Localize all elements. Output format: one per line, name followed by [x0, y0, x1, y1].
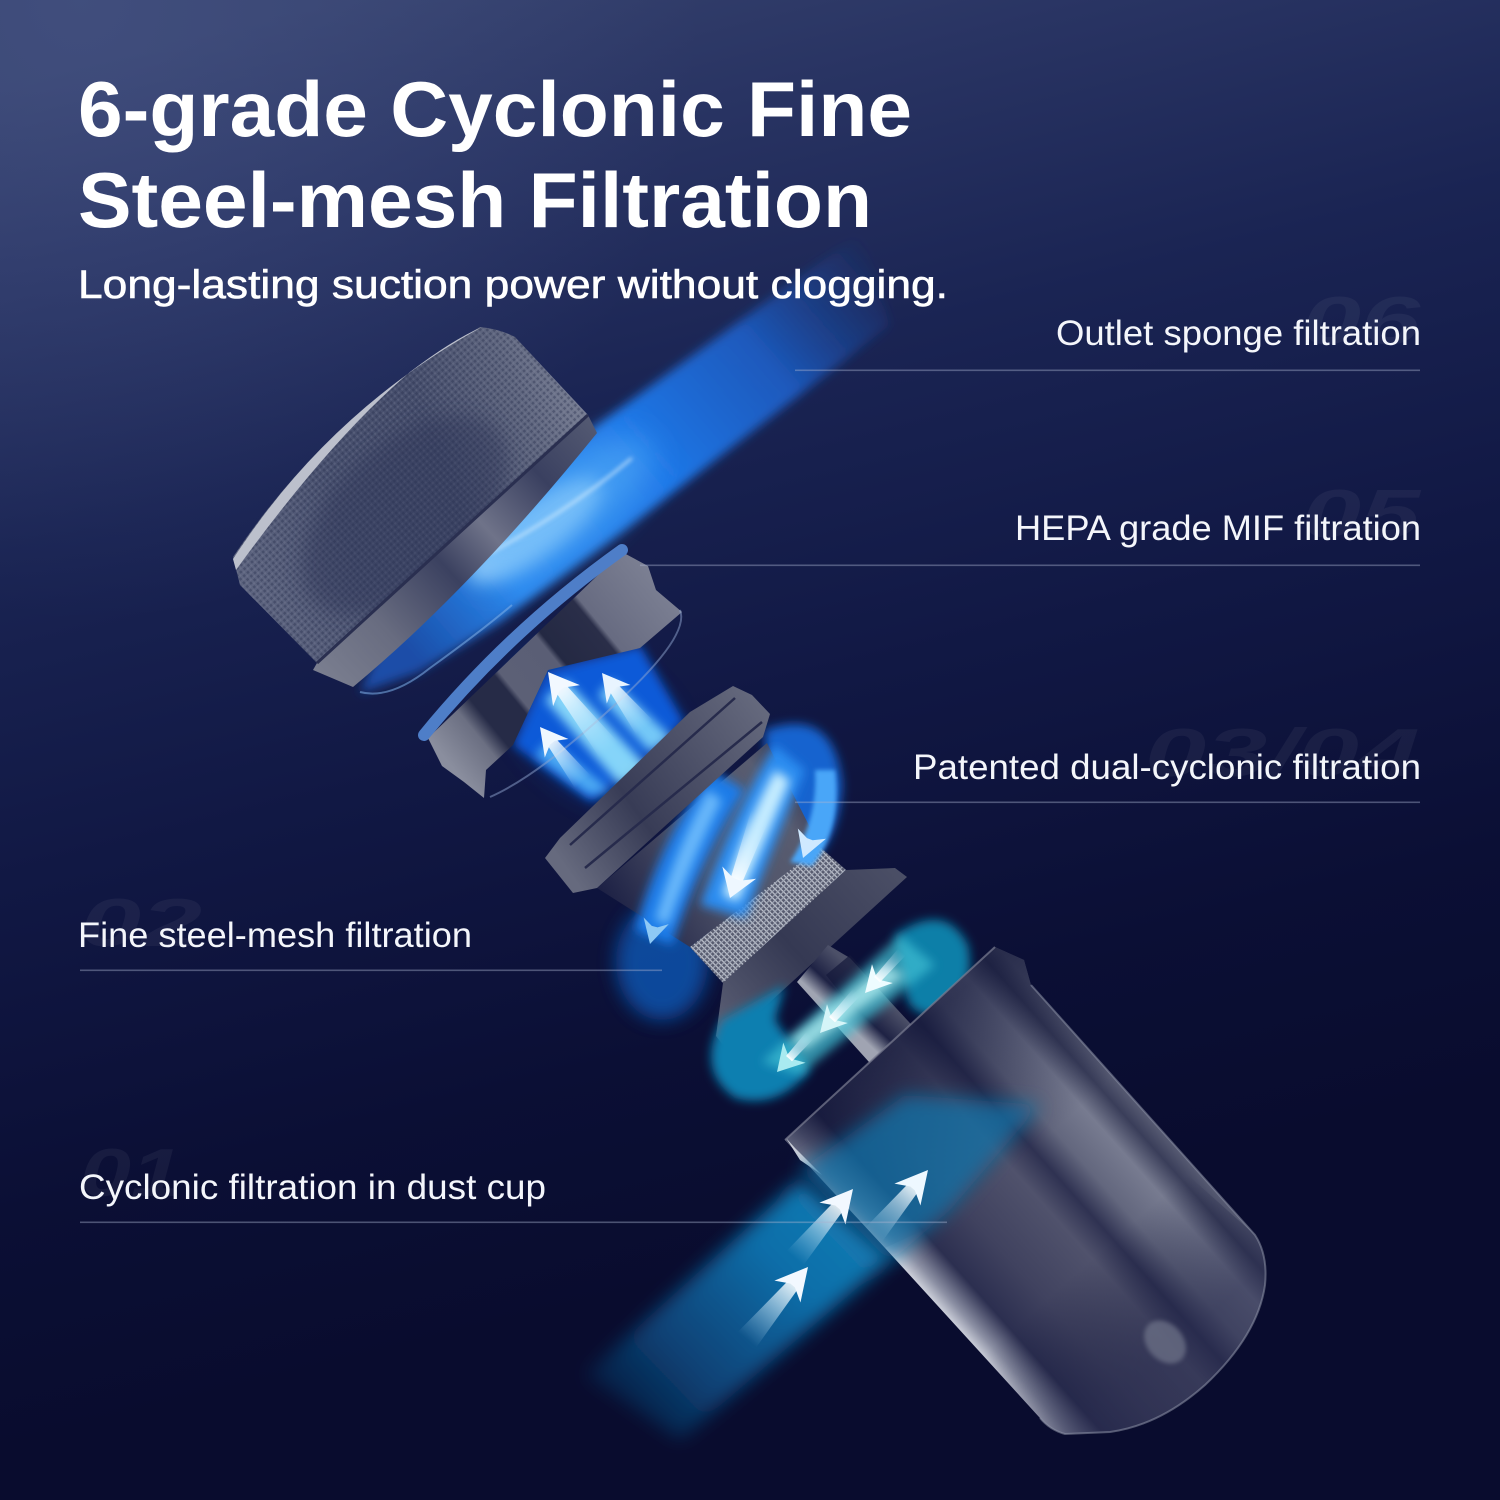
airflow glow through the filter — [513, 645, 684, 802]
left swirl blob behind cyclone — [616, 904, 708, 1020]
outlet cap: knurled cylinder — [233, 327, 597, 687]
dust cup — [785, 947, 1266, 1434]
ghost step numbers: 05 — [1302, 476, 1422, 552]
sponge filter ring with threads — [424, 550, 705, 830]
subtitle: Long-lasting suction power without clogging. — [78, 263, 948, 307]
knurled texture — [233, 327, 588, 663]
ghost step numbers: 03/04 — [1145, 715, 1420, 791]
flange cone — [716, 868, 907, 1045]
right swirl blob behind cyclone — [765, 724, 842, 868]
up arrows — [535, 662, 623, 761]
ghost step numbers: 01 — [80, 1135, 182, 1211]
filter rim — [424, 550, 622, 735]
glow halo behind filter — [485, 620, 705, 830]
cyclone body — [545, 686, 846, 983]
cup latch detail — [1136, 1312, 1194, 1372]
cap top rim highlight — [233, 327, 482, 570]
title: 6-grade Cyclonic Fine — [78, 65, 912, 153]
title — [78, 65, 912, 244]
teal swirl, lower blob — [711, 985, 810, 1101]
rounded end shading — [960, 1150, 1266, 1434]
ghost step numbers — [80, 283, 1422, 1211]
intake arrows — [734, 1159, 941, 1351]
teal swirl front with arrows — [762, 935, 935, 1082]
labels — [78, 314, 1421, 1207]
lid translucency — [785, 947, 1120, 1248]
cyclone top collar — [545, 686, 770, 893]
teal swirl around the tube, back — [895, 920, 970, 1015]
blue band through the cup — [800, 1095, 1040, 1262]
labels: Cyclonic filtration in dust cup — [79, 1168, 546, 1207]
ghost step numbers: 06 — [1302, 283, 1422, 359]
filter transparent lower edge — [490, 610, 681, 797]
callout leader lines — [80, 370, 1420, 1223]
airflow beam: exhaust out of the top — [360, 232, 890, 694]
cap lower band — [313, 415, 597, 687]
title: Steel-mesh Filtration — [78, 156, 872, 244]
airflow beam: intake at the bottom — [585, 1180, 892, 1440]
cup end outline — [1031, 985, 1266, 1434]
labels: Outlet sponge filtration — [1056, 314, 1421, 353]
labels: HEPA grade MIF filtration — [1015, 509, 1421, 548]
cup lid edge — [786, 1138, 822, 1175]
labels: Patented dual-cyclonic filtration — [913, 748, 1421, 787]
labels: Fine steel-mesh filtration — [78, 916, 472, 955]
central tube — [797, 945, 920, 1072]
dark centre of knurling — [266, 379, 544, 651]
swirl streaks with arrows — [635, 770, 745, 945]
steel mesh section — [690, 847, 846, 983]
ghost step numbers: 02 — [80, 885, 202, 961]
